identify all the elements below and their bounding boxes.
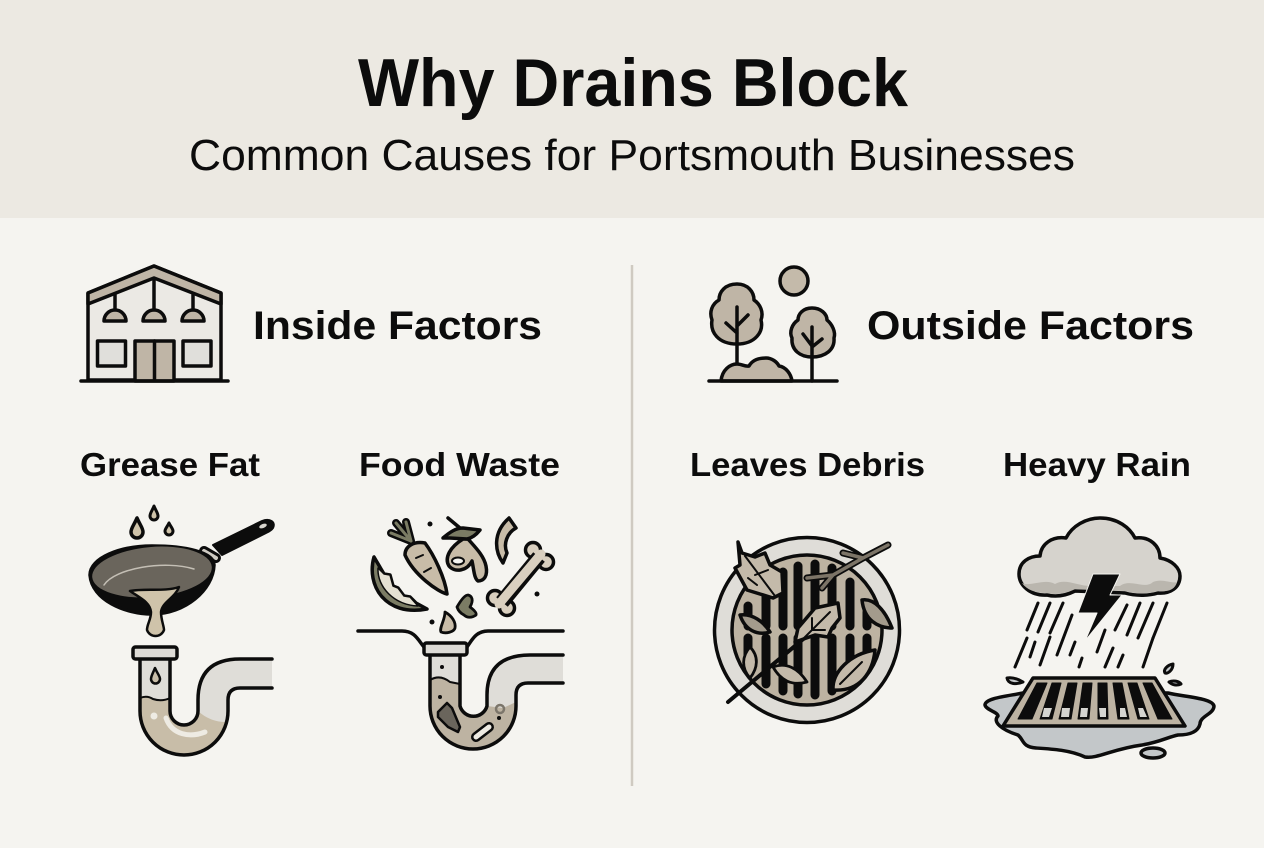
panel: inside factors xyxy=(80,266,563,755)
panel: outside factors xyxy=(690,267,1214,758)
heading: outside factors: Outside Factors xyxy=(867,304,1194,348)
melon rind xyxy=(372,557,427,610)
bone xyxy=(488,542,554,616)
puddle xyxy=(985,693,1214,757)
carrot xyxy=(391,522,447,594)
label: food waste: Food Waste xyxy=(359,446,560,483)
label: grease fat: Grease Fat xyxy=(80,446,260,483)
garlic clove xyxy=(441,612,455,633)
header band xyxy=(0,0,1264,218)
left leaf xyxy=(740,615,770,633)
debris dots xyxy=(428,522,540,624)
subtitle: Common Causes for Portsmouth Businesses xyxy=(189,131,1075,180)
small bottom leaf xyxy=(773,665,807,683)
right leaf xyxy=(862,600,892,628)
pouring grease xyxy=(130,587,179,636)
central leaf xyxy=(795,603,840,642)
lower right leaf xyxy=(833,650,875,690)
large maple leaf xyxy=(735,542,783,598)
small left leaf xyxy=(744,647,756,678)
icon: trees and sun xyxy=(709,267,837,381)
title: Why Drains Block xyxy=(358,45,908,121)
pan handle xyxy=(204,551,216,558)
rain xyxy=(1015,603,1167,667)
icon: food waste and pipe xyxy=(358,518,563,749)
twig xyxy=(807,545,888,588)
green scrap xyxy=(457,595,476,617)
icon: leaves on drain grate xyxy=(714,538,900,722)
icon: grease pan and pipe xyxy=(90,506,274,755)
label: leaves debris: Leaves Debris xyxy=(690,446,925,483)
lightning bolt xyxy=(1078,574,1122,641)
cloud xyxy=(1019,518,1180,596)
pan body xyxy=(90,546,214,614)
splashes xyxy=(1007,664,1181,685)
stem xyxy=(728,625,820,702)
label: heavy rain: Heavy Rain xyxy=(1003,446,1191,483)
heading: inside factors: Inside Factors xyxy=(253,304,542,348)
curved peel xyxy=(497,518,516,563)
clogged trap xyxy=(430,655,563,749)
icon: storm over street drain xyxy=(985,518,1214,758)
street grate xyxy=(1003,678,1185,726)
p-trap pipe xyxy=(140,659,272,755)
icon: building interior xyxy=(81,266,228,381)
droplets xyxy=(131,506,173,538)
vegetable peel xyxy=(447,539,487,581)
grate slots xyxy=(748,564,867,695)
